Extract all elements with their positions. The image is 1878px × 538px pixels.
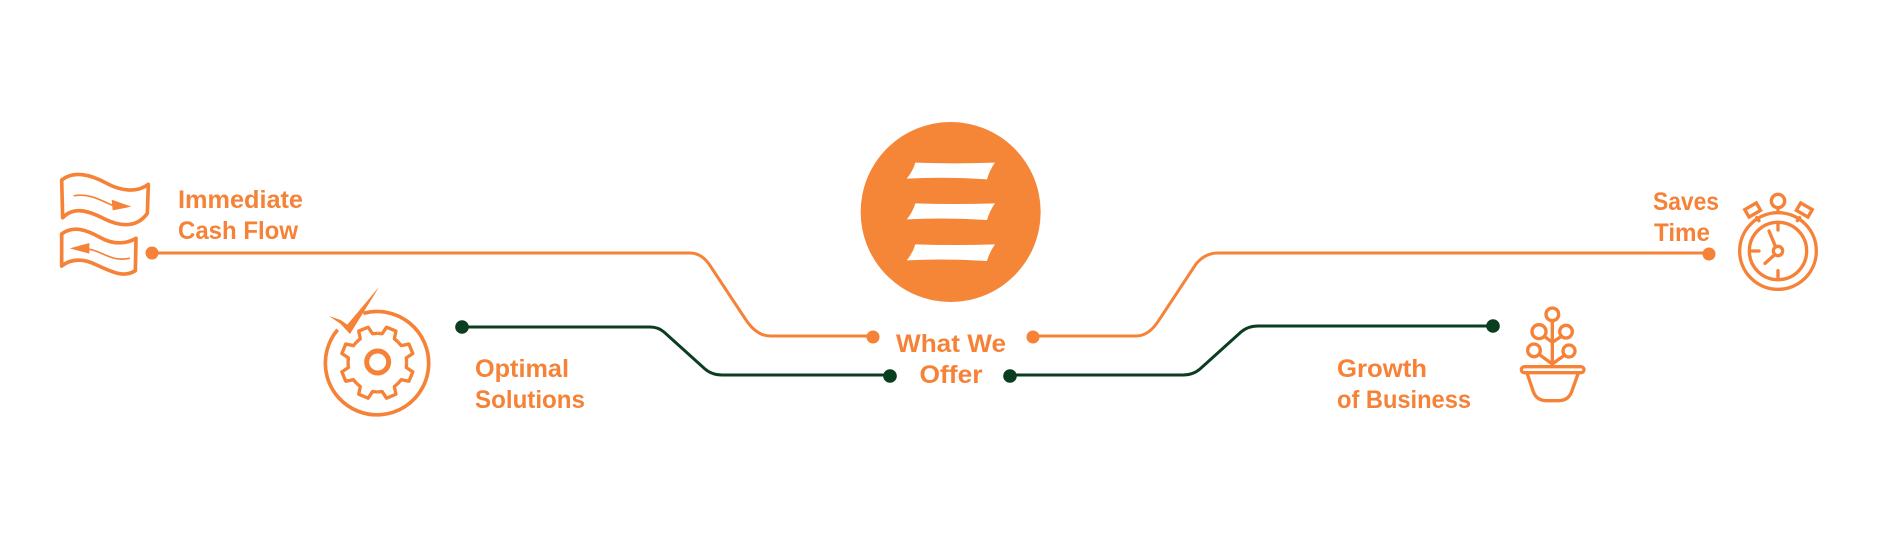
label: growth of business: Growth xyxy=(1337,355,1427,383)
icon: stopwatch xyxy=(1740,194,1816,289)
label: optimal solutions: Solutions xyxy=(475,386,585,414)
icon: potted plant xyxy=(1521,308,1584,401)
label: growth of business: of Business xyxy=(1337,386,1471,414)
label: saves time: Time xyxy=(1654,219,1710,247)
connector: immediate cash flow xyxy=(146,246,880,344)
central heading: What We xyxy=(896,330,1006,358)
connector: saves time xyxy=(1026,248,1716,344)
central heading: Offer xyxy=(920,361,983,389)
label: optimal solutions xyxy=(475,355,585,414)
label: saves time: Saves xyxy=(1653,188,1719,216)
central logo circle xyxy=(861,122,1041,302)
connector: optimal solutions xyxy=(455,320,897,383)
icon: gear with check mark xyxy=(325,287,429,415)
label: growth of business xyxy=(1337,355,1471,414)
label: immediate cash flow: Immediate xyxy=(178,186,303,214)
label: saves time xyxy=(1653,188,1719,247)
label: immediate cash flow: Cash Flow xyxy=(178,217,299,245)
icon: banknotes cash flow xyxy=(62,174,148,274)
central heading xyxy=(896,330,1006,389)
label: optimal solutions: Optimal xyxy=(475,355,569,383)
connector: growth of business xyxy=(1003,319,1500,383)
label: immediate cash flow xyxy=(178,186,303,245)
